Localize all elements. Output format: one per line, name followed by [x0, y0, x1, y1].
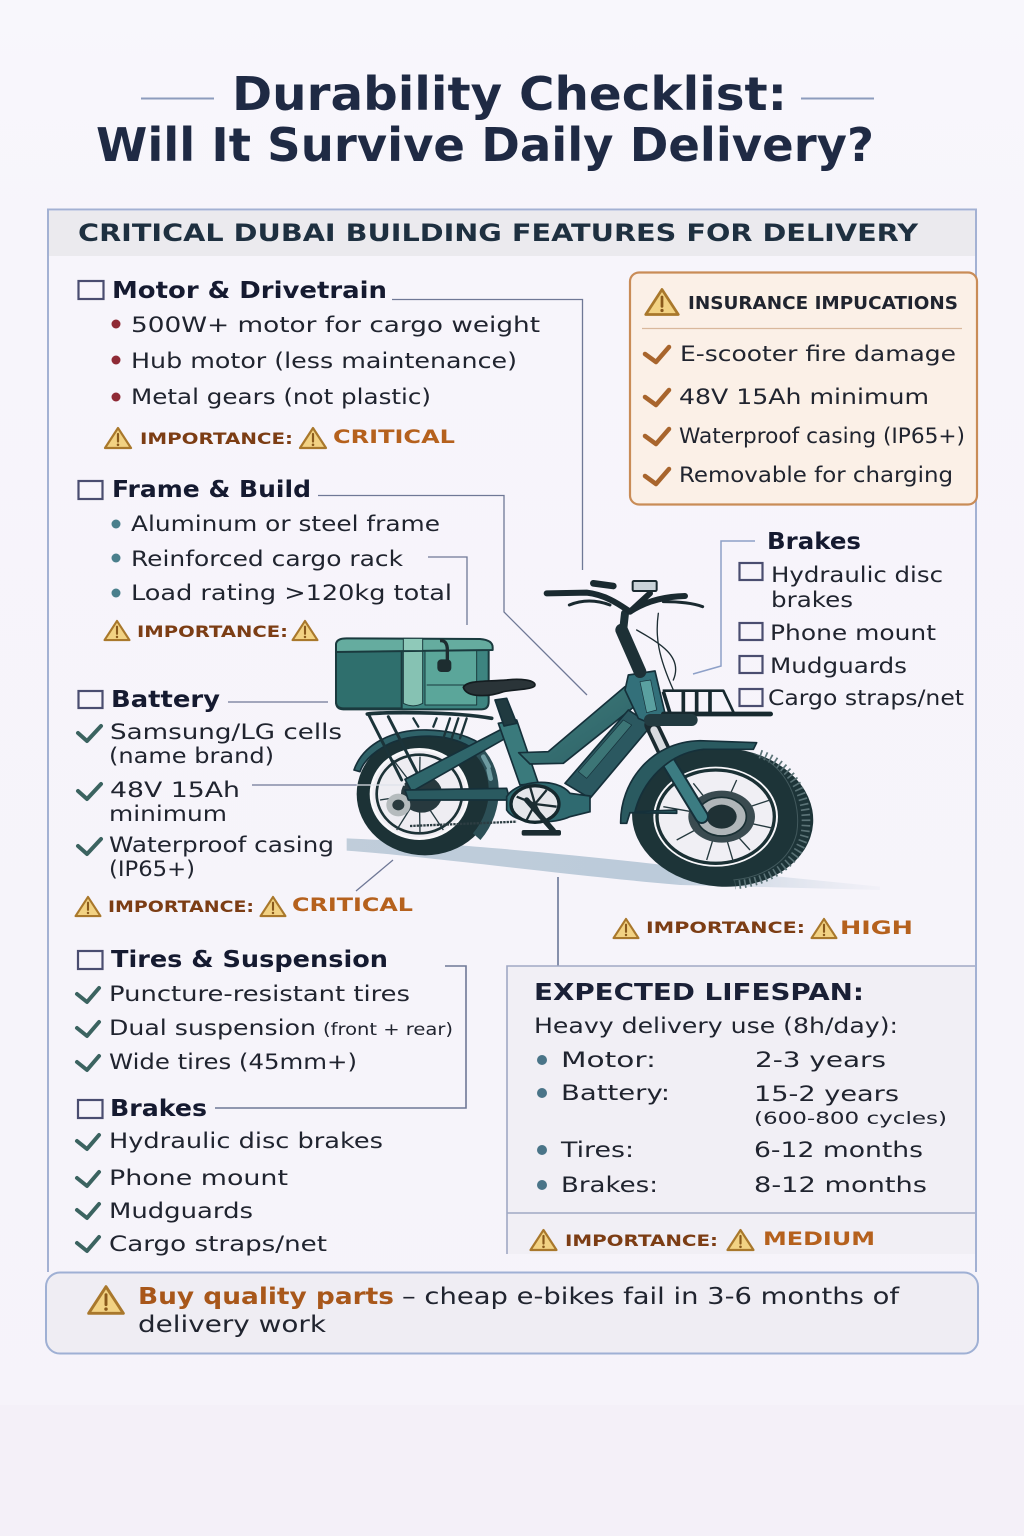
- front rack: [663, 691, 771, 714]
- panel header band: [49, 211, 975, 256]
- section: motor and drivetrain: Metal gears (not plastic): [131, 385, 431, 409]
- section: tires and suspension: Tires & Suspension: [111, 947, 388, 973]
- section: motor and drivetrain: IMPORTANCE:: [140, 429, 293, 448]
- importance: high: IMPORTANCE:: [646, 918, 805, 937]
- section: battery: (name brand): [109, 744, 274, 768]
- right checklist: brakes: Cargo straps/net: [768, 686, 964, 710]
- front wheel: [627, 742, 818, 893]
- section: brakes and accessories: Hydraulic disc brakes: [109, 1129, 383, 1153]
- panel: expected lifespan: IMPORTANCE:: [565, 1231, 718, 1250]
- handlebars and stem: [547, 581, 703, 690]
- section: frame and build: [78, 477, 452, 641]
- section: tires and suspension: Dual suspension: [109, 1016, 316, 1040]
- seat: [463, 679, 535, 696]
- ground shadow: [347, 838, 880, 890]
- section: battery: (IP65+): [109, 857, 195, 881]
- rear rack: [367, 713, 492, 780]
- right checklist: brakes: Phone mount: [770, 621, 936, 645]
- section: motor and drivetrain: 500W+ motor for cargo weight: [131, 313, 540, 337]
- battery leader overlay: [357, 783, 405, 787]
- front fender: [621, 741, 757, 823]
- section: tires and suspension: Wide tires (45mm+): [109, 1050, 357, 1074]
- panel: expected lifespan: (600-800 cycles): [754, 1109, 947, 1129]
- panel: expected lifespan: Heavy delivery use (8h/day):: [534, 1014, 898, 1038]
- right checklist: brakes: Mudguards: [770, 654, 907, 678]
- rear fender: [354, 730, 480, 772]
- section: motor and drivetrain: [78, 278, 540, 448]
- section: frame and build: IMPORTANCE:: [137, 622, 288, 641]
- motor and crank: [410, 782, 590, 836]
- section: frame and build: Load rating >120kg total: [131, 581, 452, 605]
- cargo box: [336, 638, 493, 709]
- panel: expected lifespan: 15-2 years: [754, 1082, 899, 1106]
- section: motor and drivetrain: Motor & Drivetrain: [112, 278, 387, 304]
- leader lines: [215, 300, 755, 1108]
- section: battery: 48V 15Ah: [110, 778, 240, 802]
- right checklist: brakes: [740, 529, 964, 710]
- illustration: cargo e-bike: [336, 581, 880, 893]
- panel header band: CRITICAL DUBAI BUILDING FEATURES FOR DELIVERY: [78, 219, 919, 247]
- importance: high: [614, 917, 913, 939]
- right checklist: brakes: Brakes: [767, 529, 861, 555]
- panel: expected lifespan: Battery:: [561, 1081, 670, 1105]
- section: battery: Samsung/LG cells: [110, 720, 342, 744]
- title: Durability Checklist:: [232, 67, 787, 121]
- section: tires and suspension: Puncture-resistant tires: [109, 982, 410, 1006]
- callout: insurance implications: Removable for charging: [679, 463, 953, 487]
- footer callout: – cheap e-bikes fail in 3-6 months of: [402, 1284, 900, 1310]
- title: [96, 67, 874, 172]
- panel: expected lifespan: 2-3 years: [755, 1048, 886, 1072]
- section: frame and build: Frame & Build: [112, 477, 311, 503]
- right checklist: brakes: Hydraulic disc: [771, 563, 943, 587]
- callout: insurance implications: [630, 272, 977, 504]
- callout: insurance implications: Waterproof casing (IP65+): [679, 424, 965, 448]
- panel: expected lifespan: MEDIUM: [763, 1228, 875, 1250]
- section: frame and build: Aluminum or steel frame: [131, 512, 440, 536]
- section: tires and suspension: (front + rear): [323, 1020, 453, 1040]
- panel: expected lifespan: 8-12 months: [754, 1173, 927, 1197]
- section: motor and drivetrain: CRITICAL: [333, 426, 455, 448]
- section: battery: CRITICAL: [292, 894, 413, 916]
- section: brakes and accessories: Mudguards: [109, 1199, 253, 1223]
- section: brakes and accessories: Brakes: [110, 1096, 207, 1122]
- panel: expected lifespan: EXPECTED LIFESPAN:: [534, 980, 864, 1006]
- rear wheel: [357, 733, 494, 855]
- section: battery: [76, 687, 413, 916]
- panel: expected lifespan: 6-12 months: [754, 1138, 923, 1162]
- section: tires and suspension: [77, 947, 453, 1074]
- importance: high: HIGH: [840, 917, 913, 939]
- panel: expected lifespan: Motor:: [561, 1048, 656, 1072]
- section: frame and build: Reinforced cargo rack: [131, 547, 404, 571]
- section: battery: minimum: [109, 802, 227, 826]
- section: battery: Waterproof casing: [109, 833, 334, 857]
- main panel frame: [48, 210, 976, 1272]
- panel: expected lifespan: [507, 966, 975, 1254]
- section: brakes and accessories: [77, 1096, 383, 1256]
- callout: insurance implications: INSURANCE IMPUCATIONS: [688, 293, 958, 314]
- footer callout: delivery work: [138, 1312, 327, 1338]
- panel: expected lifespan: Tires:: [560, 1138, 634, 1162]
- footer callout: Buy quality parts: [138, 1284, 394, 1310]
- section: battery: Battery: [111, 687, 220, 713]
- section: brakes and accessories: Cargo straps/net: [109, 1232, 327, 1256]
- right checklist: brakes: brakes: [771, 588, 853, 612]
- panel: expected lifespan: Brakes:: [561, 1173, 658, 1197]
- section: brakes and accessories: Phone mount: [109, 1166, 288, 1190]
- fork: [650, 720, 702, 817]
- footer callout: [46, 1272, 978, 1354]
- callout: insurance implications: 48V 15Ah minimum: [679, 385, 929, 409]
- section: battery: IMPORTANCE:: [108, 897, 254, 916]
- callout: insurance implications: E-scooter fire damage: [680, 342, 956, 366]
- title: Will It Survive Daily Delivery?: [96, 118, 874, 172]
- main frame: [405, 671, 665, 800]
- section: motor and drivetrain: Hub motor (less maintenance): [131, 349, 517, 373]
